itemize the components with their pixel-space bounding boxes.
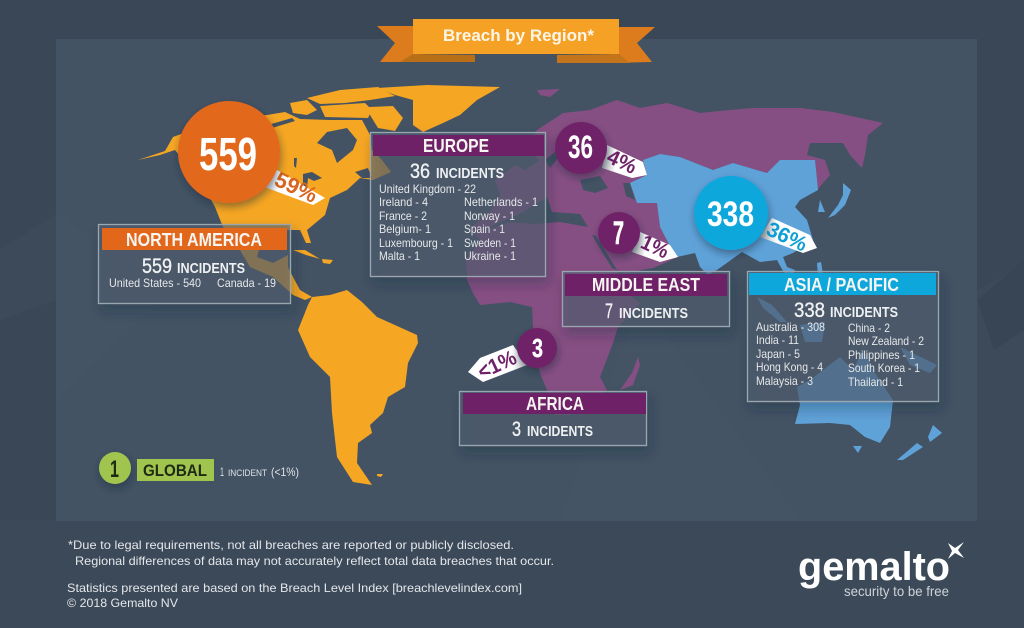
map: Svalbard: [537, 89, 560, 97]
Asia Pacific incidents: [794, 299, 898, 322]
North America incidents: 559: [142, 255, 172, 278]
badge: Africa less than 1%: <1%: [474, 346, 521, 384]
Global incidents: INCIDENT: [228, 468, 267, 479]
footnote: Statistics presented are based on the Breach Level Index [breachlevelindex.com]: [67, 581, 522, 595]
Europe incidents: [410, 160, 504, 183]
North America incidents: [142, 255, 245, 278]
Middle East incidents: 7: [605, 300, 613, 323]
Asia Pacific countries: South Korea - 1: [848, 361, 920, 375]
panel: Africa: [460, 392, 646, 446]
footnote: *Due to legal requirements, not all breaches are reported or publicly disclosed.: [68, 538, 514, 552]
Europe countries: Malta - 1: [379, 249, 420, 263]
Global badge: [99, 452, 131, 484]
map: South America: [298, 290, 418, 485]
Asia Pacific countries: India - 11: [756, 333, 799, 347]
Europe incidents: 36: [410, 160, 430, 183]
map: Tasmania and New Zealand: [853, 425, 942, 460]
Europe countries: Luxembourg - 1: [379, 236, 453, 250]
badge: North America 559: 559: [199, 128, 257, 180]
map: Europe, Africa, Middle East and Russia: [466, 100, 883, 415]
Global incidents: [220, 465, 299, 479]
Asia Pacific countries: Thailand - 1: [848, 375, 903, 389]
Global badge: 1: [110, 456, 119, 483]
Europe countries: [379, 182, 538, 263]
panel: Europe: [370, 132, 546, 276]
panel: North America: [98, 224, 290, 304]
badge: North America 559: [178, 101, 280, 203]
Middle East incidents: INCIDENTS: [619, 306, 688, 322]
Africa heading: [463, 393, 646, 414]
North America heading: NORTH AMERICA: [126, 230, 262, 250]
Europe countries: Netherlands - 1: [464, 195, 538, 209]
badge: Asia 338: 338: [707, 195, 754, 234]
Africa incidents: 3: [512, 418, 521, 441]
Global incidents: (<1%): [271, 465, 299, 479]
badge: Middle East 7: 7: [613, 215, 624, 251]
badge: Africa 3: 3: [532, 333, 543, 363]
Europe countries: Norway - 1: [464, 209, 515, 223]
footnote: [67, 538, 554, 610]
map: North America inland waters: [268, 118, 372, 188]
badge: Asia 36%: 36%: [763, 218, 811, 257]
map: Falkland Islands: [377, 474, 383, 477]
Europe countries: Sweden - 1: [464, 236, 516, 250]
map: North America: [138, 85, 500, 300]
Europe countries: Ukraine - 1: [464, 249, 516, 263]
Asia Pacific heading: [749, 273, 936, 295]
Europe heading: EUROPE: [423, 136, 489, 156]
badge: Middle East 1%: 1%: [637, 231, 673, 264]
Asia Pacific incidents: INCIDENTS: [830, 305, 898, 321]
map: Madagascar: [620, 357, 640, 390]
badge: Europe 4%: 4%: [603, 145, 640, 179]
panel: Middle East: [562, 272, 730, 326]
Africa incidents: INCIDENTS: [527, 424, 593, 440]
footnote: © 2018 Gemalto NV: [67, 596, 178, 610]
Middle East heading: [565, 274, 727, 296]
Middle East heading: MIDDLE EAST: [592, 275, 700, 295]
North America countries: [109, 276, 276, 290]
logo: Gemalto: gemalto: [798, 545, 950, 589]
Asia Pacific countries: Malaysia - 3: [756, 374, 813, 388]
North America incidents: INCIDENTS: [177, 261, 245, 277]
Europe countries: Spain - 1: [464, 222, 505, 236]
Asia Pacific countries: Philippines - 1: [848, 348, 915, 362]
map panel: [56, 39, 977, 521]
badge: Africa 3: [517, 328, 557, 368]
Asia Pacific countries: Hong Kong - 4: [756, 360, 823, 374]
badge: Europe 36: [555, 122, 607, 174]
badge: Asia 338: [694, 176, 768, 250]
Asia Pacific incidents: 338: [794, 299, 825, 322]
badge: Middle East 7: [598, 212, 640, 254]
Europe countries: France - 2: [379, 209, 427, 223]
Europe incidents: INCIDENTS: [436, 166, 504, 182]
Asia Pacific countries: New Zealand - 2: [848, 334, 924, 348]
icon: logo star: [948, 542, 964, 559]
Africa incidents: [512, 418, 593, 441]
logo tagline: security to be free: [844, 583, 949, 599]
Asia Pacific countries: China - 2: [848, 321, 890, 335]
Europe heading: [373, 135, 544, 156]
badge: Europe 36: 36: [568, 129, 593, 165]
Asia Pacific heading: ASIA / PACIFIC: [784, 275, 899, 295]
Asia Pacific countries: Australia - 308: [756, 320, 825, 334]
Global heading: GLOBAL: [143, 461, 207, 480]
map: Asia: [630, 154, 818, 284]
badge: North America 59%: 59%: [271, 167, 321, 208]
Asia Pacific countries: [756, 320, 924, 389]
title banner: Breach by Region*: [443, 26, 594, 45]
Middle East incidents: [605, 300, 688, 323]
legend: Global: [99, 452, 299, 484]
map: Asia-Pacific islands: [714, 183, 937, 373]
Europe countries: Belgium- 1: [379, 222, 431, 236]
Global incidents: 1: [220, 465, 224, 479]
Africa heading: AFRICA: [526, 394, 584, 414]
North America countries: Canada - 19: [217, 276, 276, 290]
Asia Pacific countries: Japan - 5: [756, 347, 800, 361]
world map: [138, 85, 942, 485]
North America countries: United States - 540: [109, 276, 201, 290]
title banner: [377, 19, 655, 63]
Europe countries: United Kingdom - 22: [379, 182, 476, 196]
map: inland seas: [480, 148, 635, 270]
map: Australia: [795, 350, 893, 443]
panel: Asia Pacific: [748, 272, 938, 402]
footnote: Regional differences of data may not accurately reflect total data breaches that occur.: [75, 554, 554, 568]
Europe countries: Ireland - 4: [379, 195, 428, 209]
